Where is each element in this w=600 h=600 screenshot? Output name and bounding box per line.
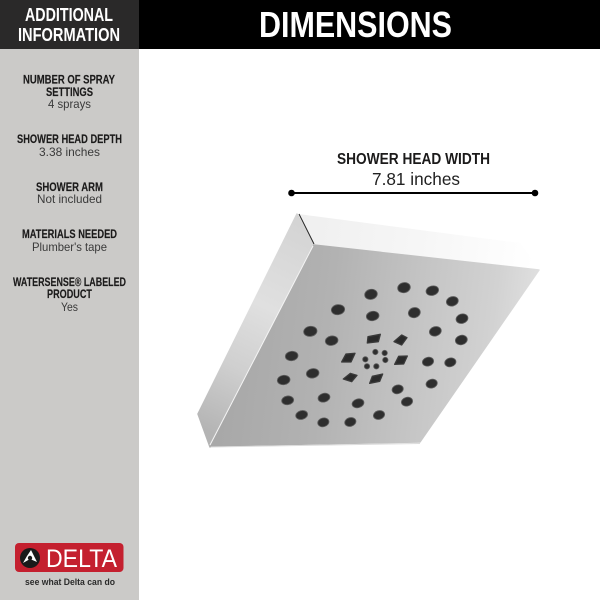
spec: shower head depth: 3.38 inches — [39, 145, 100, 159]
title banner — [139, 0, 600, 49]
width label — [337, 151, 490, 189]
spray nozzles — [277, 281, 469, 428]
spec: spray settings — [23, 72, 115, 111]
delta logo: DELTA — [46, 545, 117, 573]
spec: watersense: WATERSENSE® LABELED — [13, 275, 126, 289]
shower head — [198, 214, 540, 447]
dimension arrow line — [288, 190, 538, 196]
delta logo: see what Delta can do — [25, 577, 115, 587]
left side of shower head — [198, 214, 314, 447]
spec: watersense: Yes — [61, 300, 78, 314]
face of shower head — [211, 245, 539, 446]
spec: shower head depth: SHOWER HEAD DEPTH — [17, 132, 122, 146]
spec: materials needed — [22, 227, 117, 254]
spec: shower arm: SHOWER ARM — [36, 180, 103, 194]
sidebar panel — [0, 0, 139, 600]
top side of shower head — [298, 214, 540, 270]
spec: watersense: PRODUCT — [47, 287, 92, 301]
title banner: DIMENSIONS — [259, 4, 452, 45]
spec: shower head depth — [17, 132, 122, 159]
sidebar header: ADDITIONAL — [25, 5, 113, 25]
spec: materials needed: MATERIALS NEEDED — [22, 227, 117, 241]
spec: spray settings: SETTINGS — [46, 85, 93, 99]
width label: 7.81 inches — [372, 169, 460, 189]
spec: materials needed: Plumber's tape — [32, 240, 107, 254]
delta logo — [15, 543, 124, 587]
spec: spray settings: 4 sprays — [48, 97, 91, 111]
width label: SHOWER HEAD WIDTH — [337, 151, 490, 168]
spec: spray settings: NUMBER OF SPRAY — [23, 72, 115, 86]
spec: shower arm: Not included — [37, 192, 102, 206]
spec: watersense — [13, 275, 126, 314]
spec: shower arm — [36, 180, 103, 206]
sidebar header — [0, 0, 139, 49]
sidebar header: INFORMATION — [18, 25, 120, 45]
